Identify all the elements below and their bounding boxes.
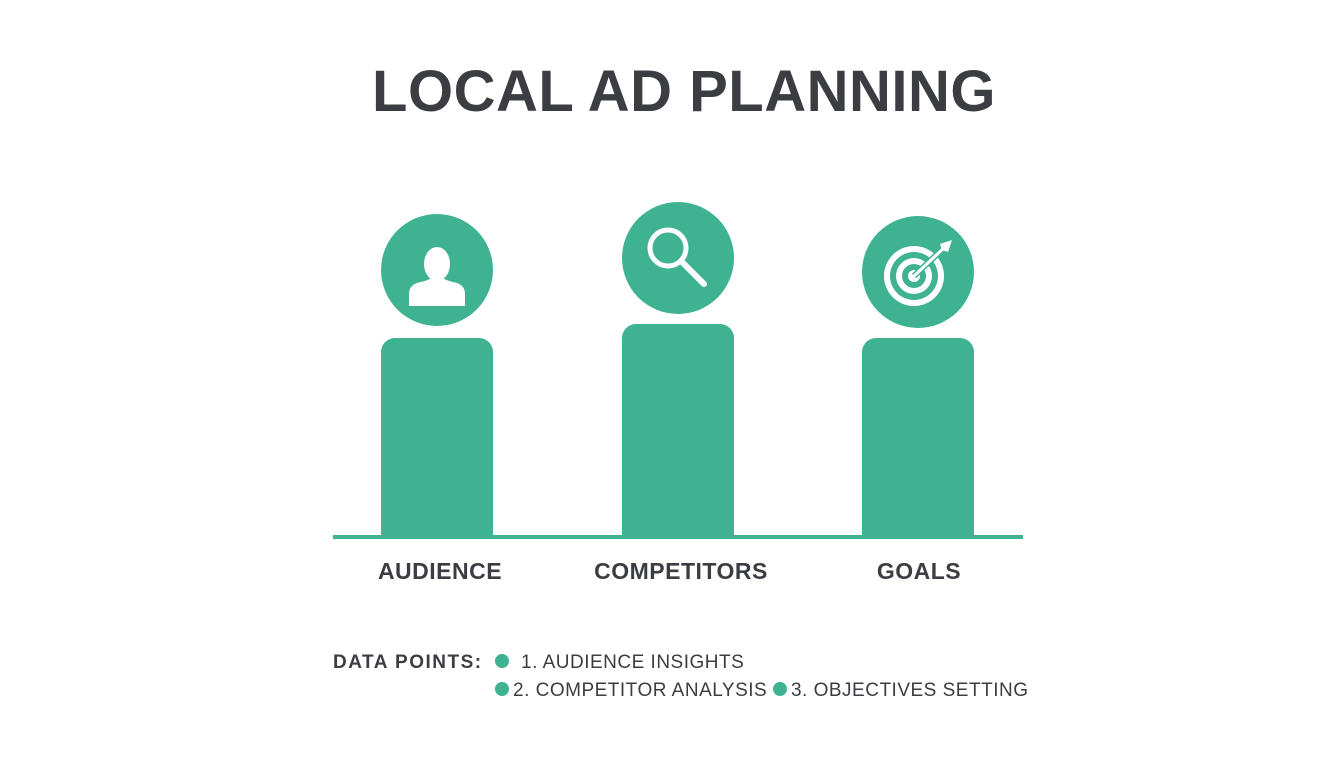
pillar: audience <box>381 338 493 537</box>
legend item 1: 1. AUDIENCE INSIGHTS <box>521 652 744 673</box>
legend: data points <box>333 652 1028 701</box>
legend items 2 and 3: 2. COMPETITOR ANALYSIS 3. OBJECTIVES SETTING <box>513 680 1028 701</box>
baseline <box>333 535 1023 539</box>
legend heading: DATA POINTS: <box>333 652 483 673</box>
label: competitors: COMPETITORS <box>594 558 768 584</box>
title: LOCAL AD PLANNING <box>372 59 996 124</box>
label: goals: GOALS <box>877 558 961 584</box>
icon: target <box>862 216 974 328</box>
pillar: competitors <box>622 324 734 537</box>
pillar: goals <box>862 338 974 537</box>
icon: magnifier <box>622 202 734 314</box>
chart: pillars <box>333 324 1023 539</box>
icon: person <box>381 214 493 326</box>
label: audience: AUDIENCE <box>378 558 502 584</box>
